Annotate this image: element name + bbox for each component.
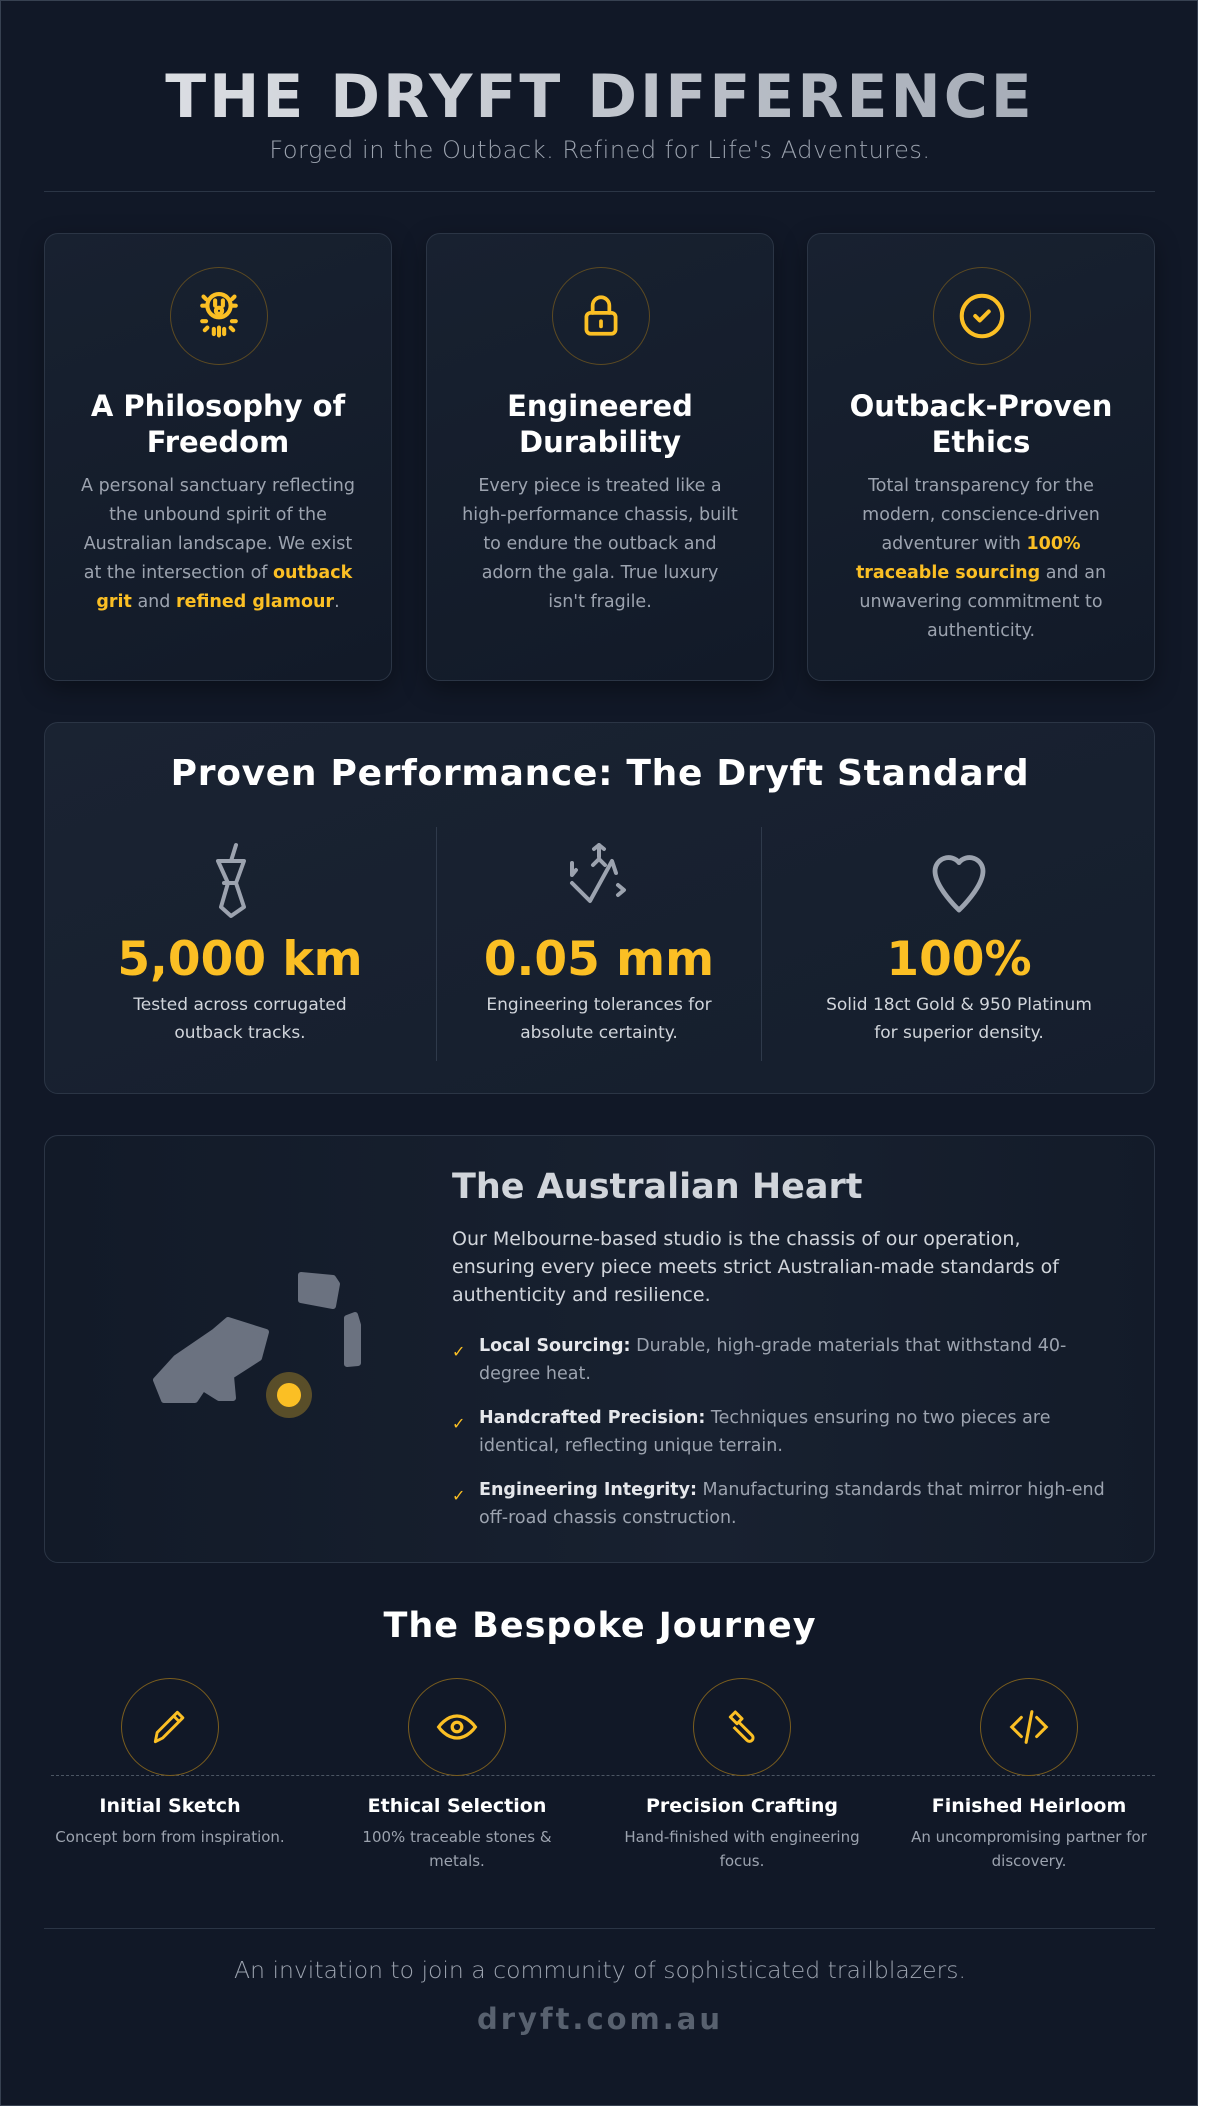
checklist: ✓ [452, 1486, 465, 1505]
heading: Engineered [507, 389, 693, 423]
icon: lock [552, 267, 650, 365]
checklist [452, 1336, 1105, 1528]
panel: proven performance [44, 722, 1155, 1094]
heading: Ethics [932, 425, 1030, 459]
panel: outback-proven ethics [807, 233, 1155, 681]
title [1, 59, 1199, 135]
text: discovery. [992, 1852, 1066, 1870]
icon: heart [932, 855, 986, 912]
text: An uncompromising partner for [911, 1828, 1147, 1846]
title: THE DRYFT DIFFERENCE [165, 62, 1035, 132]
icon: sun [170, 267, 268, 365]
text: Tested across corrugated [133, 995, 347, 1015]
checklist: ✓ [452, 1414, 465, 1433]
heading: bespoke journey: The Bespoke Journey [383, 1606, 817, 1646]
heading: the australian heart: The Australian Heart [452, 1167, 863, 1207]
map of australia [153, 1272, 361, 1418]
heading [91, 389, 346, 459]
icon: check circle [933, 267, 1031, 365]
text: Concept born from inspiration. [55, 1828, 285, 1846]
paragraph: Our Melbourne-based studio is the chassis of our operation, ensuring every piece meets strict Australian-made standards of authenticity and resilience. [452, 1228, 1059, 1306]
text: Engineering tolerances for [486, 995, 712, 1015]
footer url: dryft.com.au [477, 2002, 723, 2036]
text: for superior density. [874, 1023, 1044, 1043]
stat: 0.05 mm: 0.05 mm [484, 932, 714, 987]
text: Solid 18ct Gold & 950 Platinum [826, 995, 1092, 1015]
text: Ethical Selection [368, 1795, 546, 1817]
checklist: Engineering Integrity: Manufacturing standards that mirror high-end off-road chassis construction. [479, 1480, 1105, 1528]
panel: philosophy of freedom [44, 233, 392, 681]
icon: tool [216, 843, 246, 918]
heading [850, 389, 1112, 459]
panel: engineered durability [426, 233, 774, 681]
icon: precision arrows [570, 843, 626, 904]
stat: 100%: 100% [886, 932, 1032, 987]
checklist: ✓ [452, 1342, 465, 1361]
heading: Durability [519, 425, 681, 459]
text: Total transparency for the modern, conscience-driven adventurer with 100% traceable sourcing and an unwavering commitment to authenticity. [856, 476, 1106, 641]
text: 100% traceable stones & [362, 1828, 552, 1846]
performance heading: Proven Performance: The Dryft Standard [171, 753, 1029, 794]
step 4 icon: code [980, 1678, 1078, 1776]
heading [507, 389, 693, 459]
subtitle: Forged in the Outback. Refined for Life's Adventures. [269, 136, 931, 164]
step labels: Initial Sketch [99, 1795, 241, 1817]
text: metals. [429, 1852, 485, 1870]
step 1 icon: pencil [121, 1678, 219, 1776]
text: Every piece is treated like a high‑performance chassis, built to endure the outback and adorn the gala. True luxury [462, 476, 738, 583]
text: Finished Heirloom [932, 1795, 1126, 1817]
checklist: Local Sourcing: Durable, high-grade materials that withstand 40-degree heat. [479, 1336, 1066, 1384]
heading: Freedom [147, 425, 289, 459]
checklist: Handcrafted Precision: Techniques ensuring no two pieces are identical, reflecting unique terrain. [479, 1408, 1050, 1456]
text: focus. [720, 1852, 764, 1870]
stat: 5,000 km: 5,000 km [117, 932, 363, 987]
footer text: An invitation to join a community of sophisticated trailblazers. [234, 1956, 966, 1984]
text: Hand-finished with engineering [624, 1828, 860, 1846]
text: Precision Crafting [646, 1795, 838, 1817]
step 3 icon: tool [693, 1678, 791, 1776]
heading: Outback-Proven [850, 389, 1112, 423]
text: absolute certainty. [520, 1023, 678, 1043]
text: outback tracks. [174, 1023, 306, 1043]
text: A personal sanctuary reflecting the unbound spirit of the Australian landscape. We exist at the intersection of outback grit and refined glamour. [81, 476, 355, 612]
step 2 icon: eye [408, 1678, 506, 1776]
text: isn't fragile. [548, 592, 652, 612]
panel: australian heart [44, 1135, 1155, 1563]
heading: A Philosophy of [91, 389, 345, 423]
